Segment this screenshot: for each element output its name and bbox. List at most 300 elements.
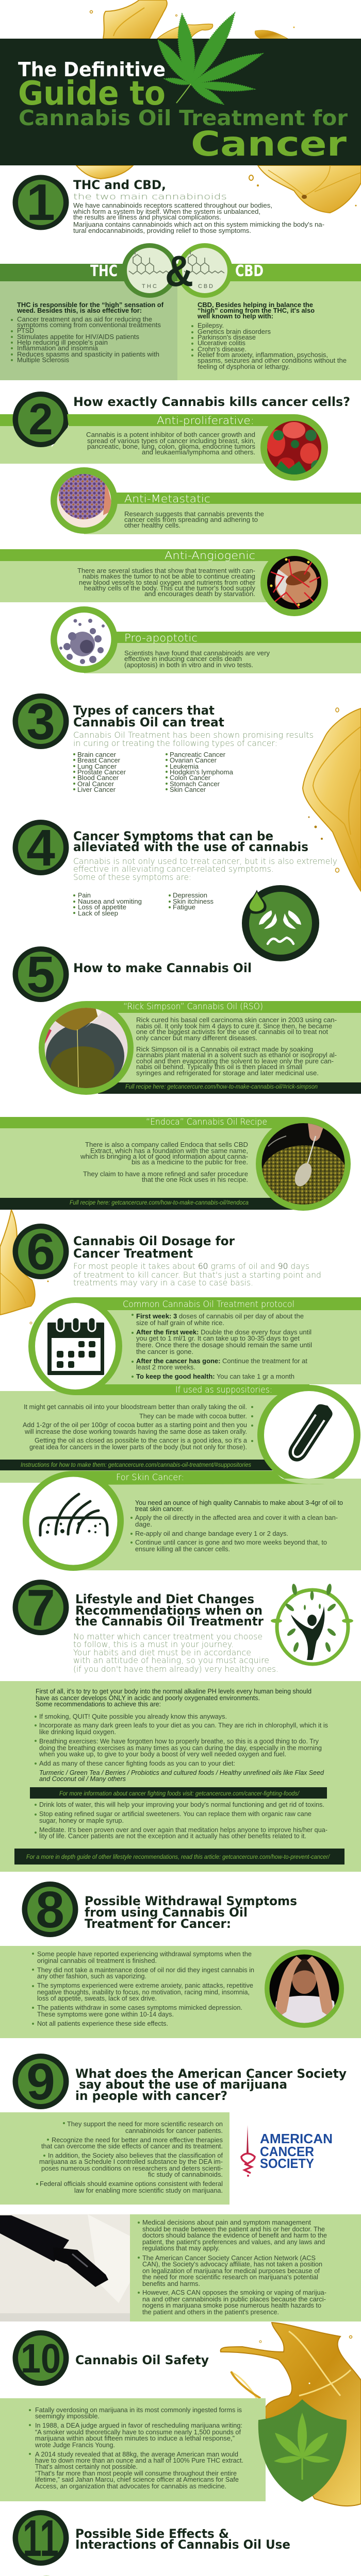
intro text: First of all, it's to try to get your body into the normal alkaline PH levels every human being should bbox=[36, 1688, 311, 1695]
more recommendations: Stop eating refined sugar or artificial sweeteners. You can replace them with organic raw cane bbox=[39, 1810, 311, 1818]
THC text: Multiple Sclerosis bbox=[17, 357, 69, 364]
panel: THC vs CBD comparison bbox=[0, 243, 361, 380]
recommendations list: and Coconut oil / Many others bbox=[39, 1775, 126, 1783]
THC molecule badge: THC bbox=[142, 283, 157, 290]
panel: medical decisions: regulations that may apply. bbox=[142, 2245, 220, 2252]
image: oil syringe bbox=[0, 2214, 130, 2321]
recommendations list: Add as many of these cancer fighting foods as you can to your diet: bbox=[39, 1760, 235, 1767]
section 9: American Cancer Society bbox=[0, 2053, 361, 2321]
list: cancers column 1: Blood Cancer bbox=[77, 774, 119, 782]
number badge 5: 5 bbox=[26, 946, 55, 1004]
list: cancers column 2: Stomach Cancer bbox=[170, 781, 220, 788]
body: Cannabis is a potent inhibitor of both cancer growth and bbox=[86, 431, 255, 438]
subheading: Some of these symptoms are: bbox=[73, 872, 191, 882]
panel: medical decisions: doctors should balance the evidence of benefit and harm to the bbox=[142, 2232, 327, 2239]
heading bbox=[75, 1592, 264, 1629]
panel: medical decisions: the need for more scientific research on marijuana's potential bbox=[142, 2274, 318, 2281]
list: symptoms column 1: Lack of sleep bbox=[78, 910, 118, 917]
body bbox=[23, 1403, 253, 1451]
image: apoptotic cell bbox=[57, 613, 111, 666]
callout: cancer fighting foods link bbox=[30, 1787, 327, 1799]
body: effective in inducing cancer cells death bbox=[124, 655, 242, 663]
subheading: Cannabis Oil Treatment has been shown promising results bbox=[73, 730, 314, 740]
intro text: We have cannabinoids receptors scattered throughout our bodies, bbox=[73, 202, 272, 209]
heading: Recommendations when on bbox=[75, 1603, 262, 1618]
body: Continue until cancer is gone and two more weeks beyond that, to bbox=[135, 1539, 327, 1546]
body: bis as a medicine to the public for free. bbox=[132, 1159, 248, 1166]
body: To keep the good health: You can take 1 gr a month bbox=[136, 1373, 294, 1380]
THC text: Cancer treatment and as aid for reducing the bbox=[17, 316, 152, 323]
icon: calendar bbox=[47, 1317, 104, 1375]
list: cancers column 2: Pancreatic Cancer bbox=[170, 751, 225, 758]
body: They claim to have a more refined and safer procedure bbox=[83, 1171, 248, 1178]
heading: in people with cancer? bbox=[75, 2089, 227, 2103]
heading: Types of cancers that bbox=[73, 703, 215, 718]
THC molecule badge bbox=[122, 243, 177, 298]
body: you get to 1 ml/1 gr. It can take up to 30-35 days to get bbox=[136, 1335, 300, 1342]
body: treat skin cancer. bbox=[135, 1505, 184, 1513]
recommendations list: Breathing exercises: We have forgotten how to properly breathe, so this is a good thing to do. Try bbox=[39, 1738, 319, 1745]
recommendations list bbox=[35, 1713, 328, 1783]
panel: pro-apoptotic bbox=[51, 606, 361, 673]
heading bbox=[73, 1234, 235, 1261]
instructions link: Instructions for how to make them: getcancercure.com/cannabis-oil-treatment/#suppositories bbox=[21, 1462, 251, 1468]
subheading: effective in alleviating cancer-related symptoms. bbox=[73, 864, 274, 874]
CBD text: Ulcerative colitis bbox=[198, 340, 245, 347]
THC text: Stimulates appetite for HIV/AIDS patients bbox=[17, 333, 139, 341]
list: cancers column 2: Skin Cancer bbox=[170, 786, 206, 793]
number badge 4 bbox=[12, 819, 69, 877]
body: nabis oil. It only took him 4 days to cure it. Since then, he became bbox=[136, 1023, 332, 1030]
logo: American Cancer Society: AMERICAN bbox=[260, 2131, 333, 2146]
panel: safety facts: Access, an organization that advocates for cannabis as medicine. bbox=[35, 2483, 226, 2490]
subheading: of treatment to kill cancer. But that's just a starting point and bbox=[73, 1270, 321, 1280]
title text bbox=[18, 58, 348, 164]
list: symptoms column 1: Loss of appetite bbox=[78, 904, 126, 911]
panel: safety facts: “A smoker would theoretically have to consume nearly 1,500 pounds of bbox=[35, 2429, 241, 2436]
ampersand: & bbox=[165, 247, 193, 295]
subheading: to follow, this is a must in your journey. bbox=[73, 1639, 234, 1649]
body: You need an ounce of high quality Cannabis to make about 3-4gr of oil to bbox=[135, 1499, 343, 1506]
subheading: the two main cannabinoids bbox=[73, 192, 227, 201]
heading: from using Cannabis Oil bbox=[85, 1905, 248, 1920]
panel: medical decisions: should be made between the patient and his or her doctor. The bbox=[142, 2226, 325, 2233]
panel: Endoca oil bbox=[0, 1117, 351, 1211]
body: negative thoughts, inability to focus, no motivation, racing mind, insomnia, bbox=[37, 1989, 250, 1996]
heading: How to make Cannabis Oil bbox=[73, 961, 252, 975]
recommendations list: like drinking liquid oxygen. bbox=[39, 1728, 116, 1736]
list: cancers column 1: Prostate Cancer bbox=[77, 769, 126, 776]
title text: Guide to bbox=[18, 75, 166, 113]
oil splash: section 10 bbox=[221, 2323, 361, 2506]
subheading bbox=[73, 856, 337, 882]
panel: safety facts: Fatally overdosing on marijuana in its most commonly ingested forms is bbox=[35, 2406, 242, 2414]
heading: Cancer Symptoms that can be bbox=[73, 829, 273, 843]
panel: medical decisions: However, ACS CAN opposes the smoking or vaping of marijua- bbox=[142, 2289, 326, 2296]
panel: Rick Simpson oil bbox=[39, 1001, 361, 1095]
recommendations list: Incorporate as many dark green leafs to your diet as you can. They are rich in chlorophyll, which it is bbox=[39, 1722, 328, 1729]
number badge 6: 6 bbox=[26, 1223, 55, 1281]
list: symptoms column 1: Nausea and vomiting bbox=[78, 898, 142, 905]
THC text: Inflammation and insomnia bbox=[17, 345, 98, 352]
panel: society position: marijuana as a Schedule I controlled substance by the DEA im- bbox=[39, 2158, 223, 2165]
body: They did not take a maintenance dose of oil nor did they ingest cannabis in bbox=[37, 1967, 254, 1974]
number badge 7: 7 bbox=[26, 1579, 55, 1637]
body: (apoptosis) in both in vitro and in vivo tests. bbox=[124, 662, 253, 669]
intro text: Some recommendations to achieve this are: bbox=[36, 1701, 161, 1708]
CBD text: “high” coming from the THC, it's also bbox=[198, 307, 315, 314]
heading bbox=[73, 703, 224, 730]
CBD text: well known to help with: bbox=[197, 313, 273, 320]
panel: society position: fic study of cannabinoids. bbox=[148, 2171, 223, 2178]
section 11: side effects and interactions bbox=[12, 2510, 361, 2576]
title text: Cannabis Oil Treatment for bbox=[19, 106, 348, 130]
CBD text bbox=[191, 301, 347, 370]
more recommendations: lity of life. Cancer patients are not the exception and it actually has other benefits related to it. bbox=[39, 1833, 306, 1840]
heading bbox=[75, 2066, 347, 2103]
number badge 10: 10 bbox=[21, 2335, 61, 2381]
body bbox=[136, 1016, 337, 1077]
body: After the first week: Double the dose every four days until bbox=[136, 1329, 311, 1336]
subheading: in curing or treating the following types of cancer: bbox=[73, 738, 277, 748]
number badge 5 bbox=[12, 946, 69, 1004]
panel: safety facts: have to down more than an ounce and a half of 100% Pure THC extract. bbox=[35, 2457, 243, 2464]
number badge 4: 4 bbox=[26, 819, 55, 877]
panel: medical decisions: Medical decisions about pain and symptom management bbox=[142, 2219, 311, 2226]
panel: anti-metastatic bbox=[51, 467, 361, 534]
body: Some people have reported experiencing withdrawal symptoms when the bbox=[37, 1951, 252, 1958]
body: They can be made with cocoa butter. bbox=[139, 1413, 247, 1420]
body: There is also a company called Endoca that sells CBD bbox=[85, 1141, 248, 1148]
image: red blood cells bbox=[267, 421, 321, 474]
body bbox=[124, 650, 270, 669]
THC text: Help reducing ill people's pain bbox=[17, 339, 108, 346]
list: symptoms column 2: Depression bbox=[173, 892, 207, 899]
panel: suppositories bbox=[0, 1384, 360, 1485]
panel: society position: In addition, the Society also believes that the classification of bbox=[48, 2152, 223, 2159]
CBD text: CBD, Besides helping in balance the bbox=[198, 301, 313, 309]
number badge 1 bbox=[12, 174, 69, 231]
recommendations list: doing the breathing exercises as many times as you can during the day, especially in the morning bbox=[39, 1744, 322, 1752]
body: spread of various types of cancer including breast, skin, bbox=[87, 437, 255, 445]
THC text: weed. Besides this, is also effective for: bbox=[17, 307, 142, 314]
body: There are several studies that show that treatment with can- bbox=[77, 567, 255, 574]
panel: medical decisions: nogens in marijuana smoke pose numerous health hazards to bbox=[142, 2302, 321, 2309]
title banner bbox=[0, 13, 361, 165]
THC column bbox=[0, 264, 177, 380]
body: that the one Rick uses in his recipe. bbox=[142, 1176, 248, 1183]
panel: society position: Federal officials should examine options consistent with federal bbox=[40, 2180, 223, 2188]
title: Anti-proliferative: bbox=[157, 414, 254, 427]
list: cancers column 1: Oral Cancer bbox=[77, 781, 114, 788]
subheading: No matter which cancer treatment you choose bbox=[73, 1632, 262, 1641]
number badge 6 bbox=[12, 1223, 69, 1281]
number badge 8 bbox=[22, 1881, 78, 1939]
body: syringes and refrigerated for storage and later medicinal use. bbox=[136, 1070, 319, 1077]
list: cancers column 1: Brain cancer bbox=[77, 751, 116, 758]
body: original cannabis oil treatment is finished. bbox=[37, 1957, 157, 1964]
subheading bbox=[73, 730, 314, 748]
panel: safety facts: wrote Judge Francis Young. bbox=[35, 2442, 115, 2449]
list: cancers column 2: Colon Cancer bbox=[170, 774, 210, 782]
CBD text: Epilepsy. bbox=[198, 322, 224, 329]
subheading: Your habits and diet must be in accordance bbox=[73, 1648, 251, 1657]
subheading: (if you don't have them already) very healthy ones. bbox=[73, 1664, 278, 1674]
list: cancers column 2 bbox=[166, 751, 233, 793]
title: Common Cannabis Oil Treatment protocol bbox=[123, 1299, 294, 1309]
number badge 2: 2 bbox=[28, 395, 53, 444]
panel: medical decisions: patient, the patient's preferences and values, and any laws and bbox=[142, 2239, 325, 2246]
section 6: dosage bbox=[0, 1223, 361, 1571]
heading: Cancer Treatment bbox=[73, 1246, 193, 1261]
body bbox=[132, 1313, 312, 1380]
body: After the cancer has gone: Continue the treatment for at bbox=[136, 1358, 308, 1365]
list: cancers column 1 bbox=[73, 751, 126, 793]
body: dage. bbox=[135, 1521, 152, 1528]
body: pancreatic, bone, lung, colon, glioma, endocrine tumors bbox=[87, 443, 255, 450]
body: new blood vessels to steal oxygen and nutrients from other bbox=[79, 579, 255, 586]
CBD text: spasms, seizures and other conditions without the bbox=[198, 357, 347, 364]
intro text: the results are illness and physical complications. bbox=[73, 214, 221, 221]
heading: alleviated with the use of cannabis bbox=[73, 840, 308, 854]
section 8: withdrawal symptoms bbox=[0, 1881, 361, 2038]
body: the cancer is gone. bbox=[136, 1348, 193, 1355]
body: Rick Simpson oil is a Cannabis oil extract made by soaking bbox=[136, 1046, 313, 1053]
list: symptoms column 2: Fatigue bbox=[173, 904, 195, 911]
body: cannabis plant material in a solvent such as ethanol or isopropyl al- bbox=[136, 1052, 337, 1059]
number badge 9: 9 bbox=[26, 2053, 55, 2111]
list: cancers column 1: Liver Cancer bbox=[77, 786, 116, 793]
heading: Cannabis Oil Dosage for bbox=[73, 1234, 235, 1248]
image: tumour with blood vessels bbox=[267, 556, 321, 609]
CBD text: Relief from anxiety, inflammation, psychosis, bbox=[198, 351, 328, 359]
body: nabis oil behind. Typically this oil is then placed in small bbox=[136, 1063, 302, 1071]
body: It might get cannabis oil into your bloodstream better than orally taking the oil. bbox=[24, 1403, 247, 1411]
heading: Cannabis Oil Safety bbox=[75, 2353, 209, 2367]
list: symptoms column 1 bbox=[73, 892, 142, 917]
panel: anti-angiogenic bbox=[0, 549, 328, 616]
number badge 9 bbox=[12, 2053, 69, 2111]
CBD column bbox=[177, 264, 361, 380]
intro text: which form a system by itself. When the system is unbalanced, bbox=[73, 208, 260, 215]
body bbox=[130, 1499, 343, 1553]
heading bbox=[85, 1894, 297, 1931]
panel: medical decisions: the patient and others in the patient's presence. bbox=[142, 2309, 279, 2316]
heading: What does the American Cancer Society bbox=[75, 2066, 347, 2081]
intro text bbox=[73, 202, 324, 234]
icon: shield with cannabis leaf bbox=[258, 2399, 347, 2502]
CBD text: Parkinson's disease bbox=[198, 334, 256, 341]
body: one of the biggest activists for the use of cannabis oil to treat not bbox=[136, 1028, 329, 1036]
body: other healthy cells. bbox=[124, 522, 180, 529]
body: The symptoms experienced were extreme anxiety, panic attacks, repetitive bbox=[37, 1982, 253, 1989]
title: If used as suppositories: bbox=[175, 1385, 272, 1395]
callout: lifestyle guide link bbox=[14, 1849, 344, 1865]
panel: safety facts: seemingly impossible. bbox=[35, 2413, 100, 2420]
body bbox=[32, 1951, 254, 2027]
THC text: THC is responsible for the “high” sensation of bbox=[17, 301, 164, 309]
title: “Rick Simpson” Cannabis Oil (RSO) bbox=[123, 1002, 263, 1011]
number badge 1: 1 bbox=[26, 174, 55, 231]
oil splash: top of header bbox=[90, 0, 295, 39]
list: cancers column 1: Lung Cancer bbox=[77, 763, 117, 770]
body: any other fashion, such as vaporizing. bbox=[37, 1973, 146, 1980]
panel: safety facts: That's almost certainly not possible. bbox=[35, 2463, 138, 2470]
panel: society position: that can overcome the side effects of cancer and its treatment. bbox=[41, 2143, 223, 2150]
section 7: lifestyle and diet bbox=[0, 1579, 361, 1872]
body: First week: 3 doses of cannabis oil per day of about the bbox=[136, 1313, 304, 1320]
section 4: cancer symptoms bbox=[12, 819, 337, 961]
panel: society position bbox=[0, 2112, 229, 2205]
CBD text: feeling of dysphoria or lethargy. bbox=[198, 363, 290, 370]
number badge 2 bbox=[0, 392, 69, 464]
subheading bbox=[73, 1632, 278, 1674]
logo: American Cancer Society: SOCIETY bbox=[260, 2156, 314, 2171]
number badge 8: 8 bbox=[36, 1881, 64, 1939]
logo: American Cancer Society bbox=[241, 2125, 333, 2177]
body: Rick cured his basal cell carcinoma skin cancer in 2003 using can- bbox=[136, 1016, 337, 1024]
recipe link: Full recipe here: getcancercure.com/how-to-make-cannabis-oil/#endoca bbox=[70, 1200, 249, 1206]
list: cancers column 1: Breast Cancer bbox=[77, 757, 120, 764]
panel: society position: cannabinoids for cancer patients. bbox=[125, 2127, 223, 2134]
title text: The Definitive bbox=[18, 58, 166, 81]
list: cancers column 2: Ovarian Cancer bbox=[170, 757, 217, 764]
heading: How exactly Cannabis kills cancer cells? bbox=[73, 395, 350, 409]
panel: medical decisions: on legalization of marijuana for medical purposes because of bbox=[142, 2267, 320, 2275]
intro text bbox=[36, 1688, 311, 1708]
image: oil pouring into pot bbox=[44, 1007, 129, 1092]
section 5: how to make cannabis oil bbox=[0, 946, 361, 1211]
body: healthy cells of the body. This cut the tumor's food supply bbox=[84, 585, 256, 592]
recommendations list: Turmeric / Green Tea / Berries / Probiotics and cultured foods / Healthy unrefined oils like Flax Seed bbox=[39, 1769, 324, 1776]
list: symptoms column 1: Pain bbox=[78, 892, 91, 899]
body: nabis makes the tumor to not be able to continue creating bbox=[83, 573, 255, 580]
body: loss of appetite, sweats, lack of sex drive. bbox=[37, 1995, 157, 2002]
subheading bbox=[73, 1261, 321, 1287]
body: Add 1-2gr of the oil per 100gr of cocoa butter as a starting point and then you bbox=[23, 1421, 247, 1429]
CBD molecule badge: CBD bbox=[198, 283, 213, 290]
title: For Skin Cancer: bbox=[116, 1472, 184, 1482]
body: Scientists have found that cannabinoids are very bbox=[124, 650, 270, 657]
panel: safety facts: marijuana within about fifteen minutes to induce a lethal response,” bbox=[35, 2435, 235, 2442]
heading: Treatment for Cancer: bbox=[85, 1917, 231, 1931]
number badge 3: 3 bbox=[26, 693, 55, 751]
CBD molecule badge bbox=[177, 243, 233, 298]
oil splash: below header bbox=[76, 165, 361, 213]
image: cancer cell cluster bbox=[57, 474, 111, 528]
title: Pro-apoptotic bbox=[124, 632, 198, 644]
number badge 3 bbox=[12, 693, 69, 751]
body: there. Once there the dosage should remain the same until bbox=[136, 1342, 312, 1349]
panel: medical decisions: na and other cannabinoids in public places because the carci- bbox=[142, 2296, 326, 2303]
section 2: how cannabis kills cancer cells bbox=[0, 392, 361, 673]
panel: anti-proliferative bbox=[52, 414, 328, 481]
body: Research suggests that cannabis prevents the bbox=[124, 511, 264, 518]
body bbox=[80, 1141, 248, 1183]
panel: society position: They support the need for more scientific research on bbox=[67, 2121, 223, 2128]
intro text: tural endocannabinoids, providing relief to those symptoms. bbox=[73, 227, 251, 234]
body bbox=[77, 567, 256, 598]
CBD text: Genetics brain disorders bbox=[198, 328, 271, 335]
body: least 2 more weeks. bbox=[136, 1364, 195, 1371]
panel: lifestyle recommendations bbox=[0, 1681, 361, 1872]
heading: Interactions of Cannabis Oil Use bbox=[75, 2537, 290, 2552]
title: “Endoca” Cannabis Oil Recipe bbox=[146, 1117, 267, 1127]
panel: society position: Recognize the need for better and more effective therapies bbox=[52, 2137, 223, 2144]
image: distressed man bbox=[265, 1950, 344, 2028]
icon: sad face with tear bbox=[242, 885, 319, 961]
body: cancer cells from spreading and adhering to bbox=[124, 516, 258, 523]
panel: medical decisions: benefits and harms. bbox=[142, 2280, 200, 2287]
THC text bbox=[11, 301, 164, 364]
number badge 11: 11 bbox=[23, 2510, 59, 2567]
section 3: types of cancers bbox=[12, 693, 314, 793]
heading bbox=[75, 2527, 290, 2552]
oil splash: right of sections 3 and 4 bbox=[303, 708, 361, 891]
panel: medical decisions: The American Cancer Society Cancer Action Network (ACS bbox=[142, 2255, 316, 2262]
panel: safety facts: A 2014 study revealed that at 88kg, the average American man would bbox=[35, 2451, 238, 2458]
heading: say about the use of marijuana bbox=[79, 2077, 287, 2092]
number badge 10 bbox=[12, 2330, 69, 2386]
subheading: with an attitude of healing, so you must acquire bbox=[73, 1655, 269, 1665]
callout: cancer fighting foods link: For more information about cancer fighting foods visit: getcancercure.com/cancer-fighting-foods/ bbox=[59, 1791, 300, 1797]
panel: medical decisions bbox=[130, 2214, 361, 2321]
body: ensure killing all the cancer cells. bbox=[135, 1546, 230, 1553]
body bbox=[86, 431, 255, 456]
title: Anti-Angiogenic bbox=[165, 549, 255, 562]
intro text: have as cancer develops ONLY in acidic and poorly oxygenated environments. bbox=[36, 1694, 260, 1702]
THC band label: THC bbox=[90, 262, 118, 280]
heading: Cannabis Oil can treat bbox=[73, 715, 224, 730]
more recommendations bbox=[35, 1801, 327, 1840]
section 10: cannabis oil safety bbox=[0, 2330, 347, 2502]
list: symptoms column 2 bbox=[169, 892, 214, 911]
title: Anti-Metastatic bbox=[124, 493, 210, 505]
icon: cannabis leaf bbox=[158, 13, 262, 104]
heading bbox=[73, 829, 308, 854]
panel: medical decisions: CAN), the Society's advocacy affiliate, has not taken a position bbox=[142, 2261, 322, 2268]
body: Extract, which has a foundation with the same name, bbox=[90, 1147, 248, 1155]
subheading: Cannabis is not only used to treat cancer, but it is also extremely bbox=[73, 856, 337, 866]
title text: Cancer bbox=[191, 124, 347, 164]
body: great idea for cancers in the lower parts of the body (but not only for those). bbox=[29, 1444, 247, 1451]
body: only cancer but many different diseases. bbox=[136, 1035, 257, 1042]
THC text: PTSD bbox=[17, 327, 34, 334]
body: cohol and then evaporating the solvent to leave only the pure can- bbox=[136, 1058, 334, 1065]
body: and leukaemia/lymphoma and others. bbox=[142, 449, 255, 456]
body: Apply the oil directly in the affected area and cover it with a clean ban- bbox=[135, 1514, 338, 1521]
recipe link: Full recipe here: getcancercure.com/how-to-make-cannabis-oil/#rick-simpson bbox=[125, 1084, 318, 1090]
body: Not all patients experience these side effects. bbox=[37, 2020, 168, 2027]
more recommendations: sugar, honey or maple syrup. bbox=[39, 1817, 124, 1824]
heading: Lifestyle and Diet Changes bbox=[75, 1592, 254, 1606]
list: cancers column 2: Hodgkin's lymphoma bbox=[170, 769, 233, 776]
body: The patients withdraw in some cases symptoms mimicked depression. bbox=[37, 2004, 242, 2011]
panel: society position: law for enabling more scientific study on marijuana. bbox=[74, 2187, 223, 2194]
icon: person and leaves bbox=[271, 1583, 353, 1664]
section 1: THC and CBD bbox=[12, 174, 324, 234]
more recommendations: Meditate. It's been proven over and over again that meditation helps anyone to improve his/her qua- bbox=[39, 1826, 327, 1834]
recommendations list: If smoking, QUIT! Quite possible you already know this anyways. bbox=[39, 1713, 227, 1720]
THC text: Reduces spasms and spasticity in patients with bbox=[17, 351, 159, 358]
icon: skin and hair follicles bbox=[40, 1494, 107, 1535]
panel: safety facts bbox=[0, 2398, 266, 2501]
CBD text: Crohn's disease. bbox=[198, 346, 247, 353]
heading: THC and CBD, bbox=[73, 178, 166, 192]
subheading: treatments may vary in a case to case basis. bbox=[73, 1278, 253, 1287]
body: and encourages death by starvation. bbox=[144, 590, 255, 598]
subheading: For most people it takes about 60 grams of oil and 90 days bbox=[73, 1261, 309, 1271]
